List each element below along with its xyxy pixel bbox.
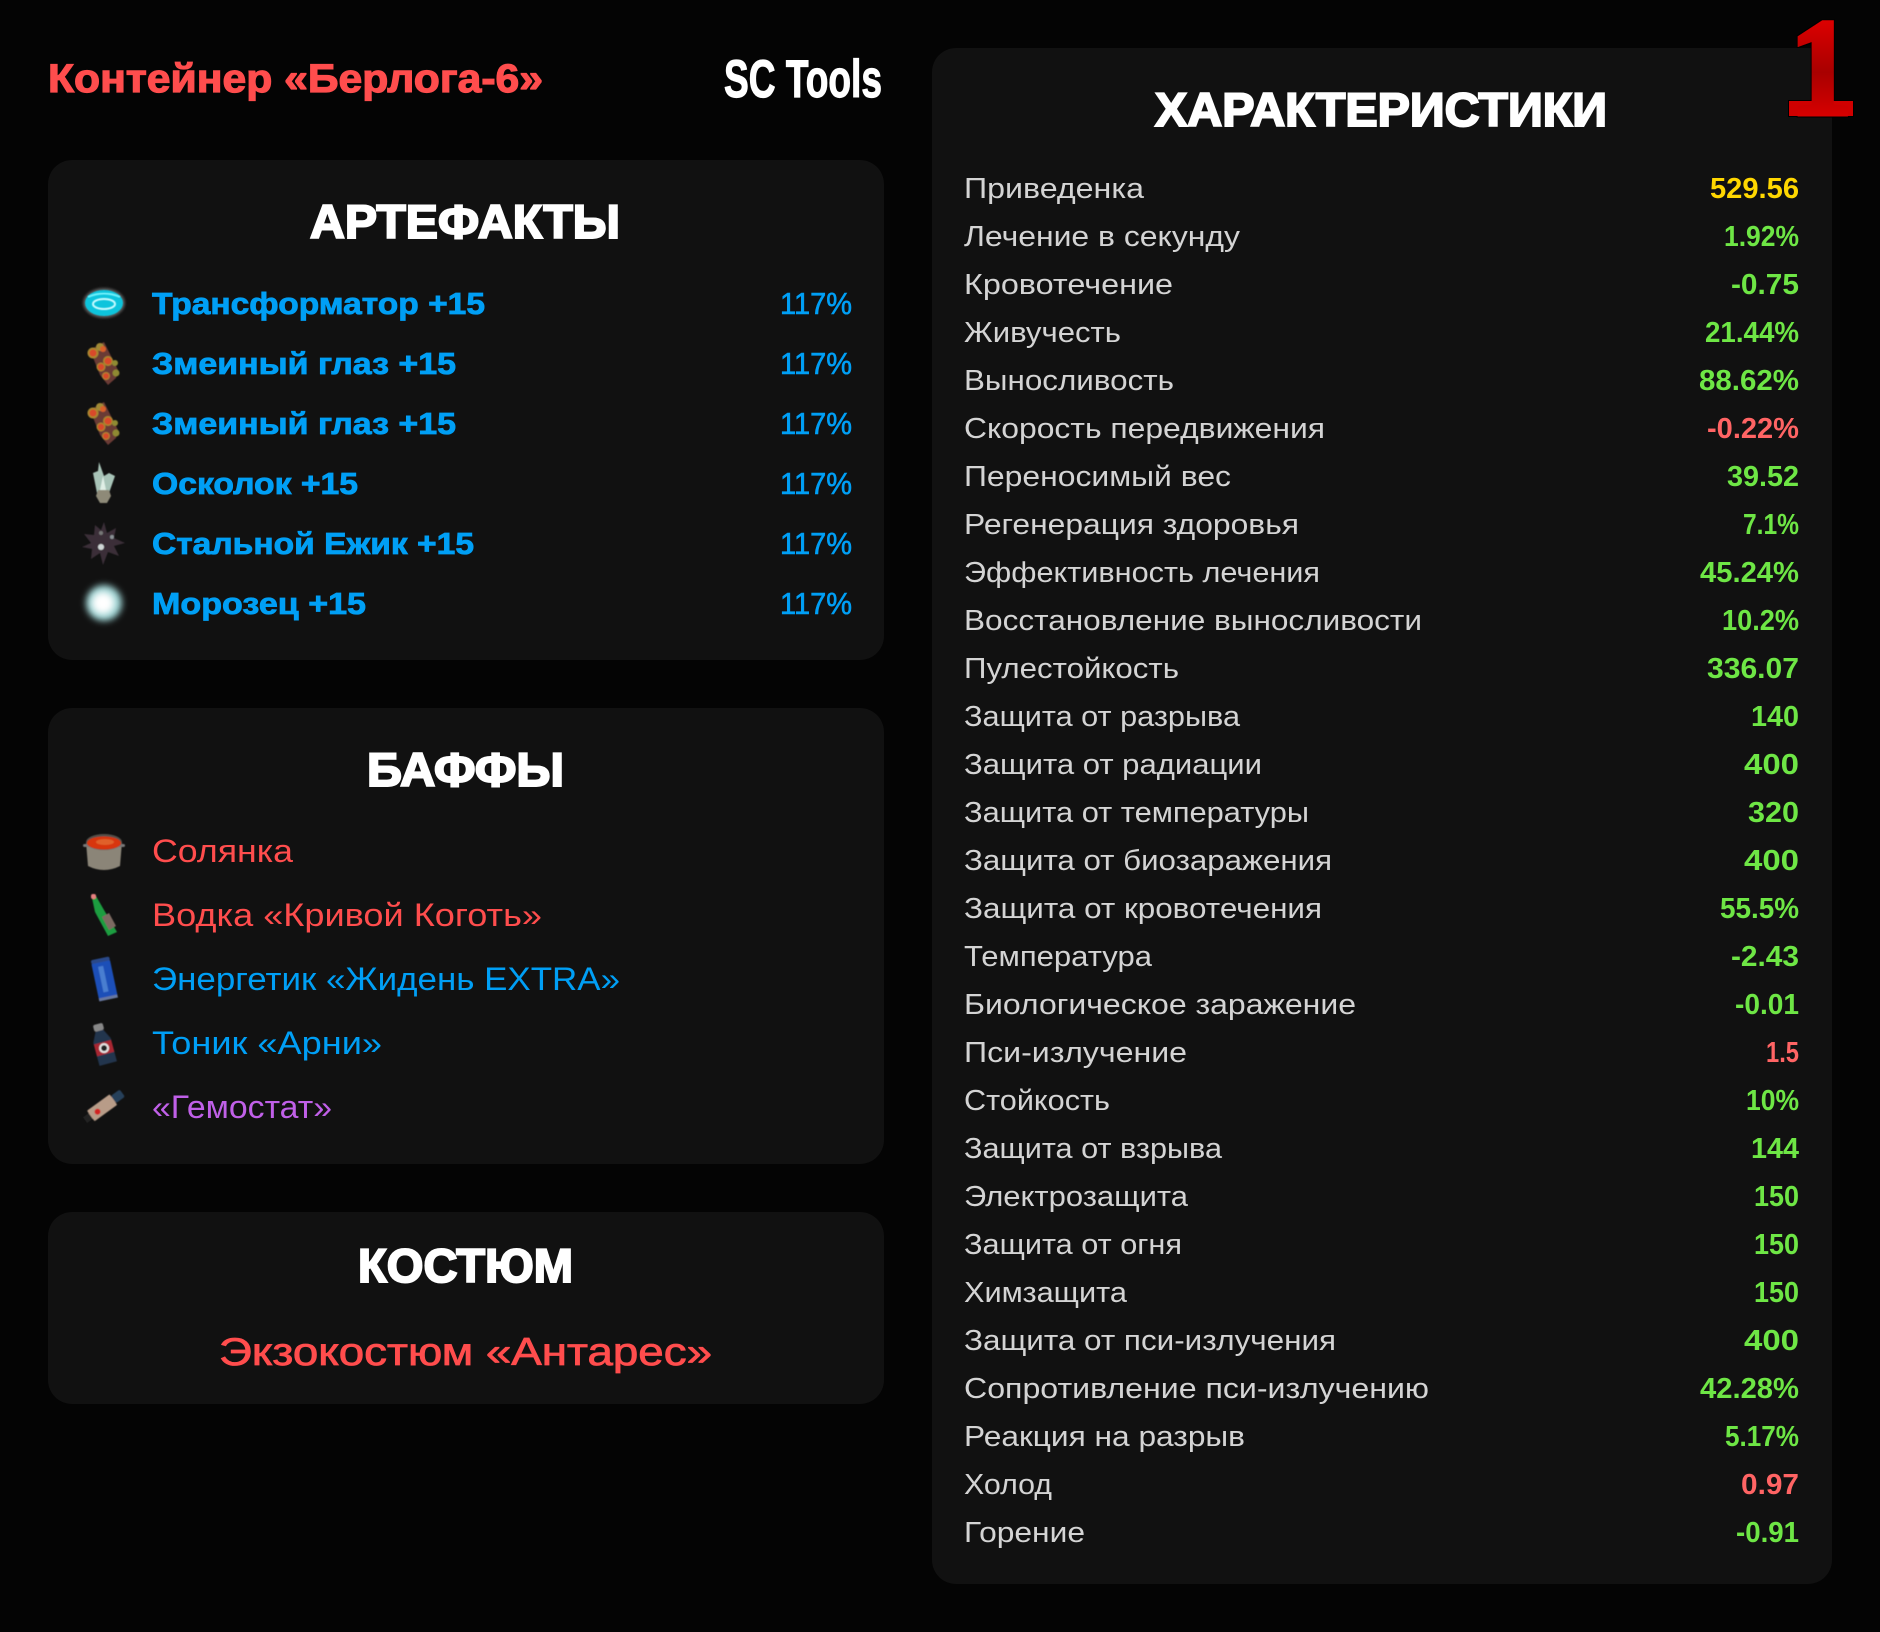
icon: snake eye (88, 342, 120, 385)
artefact row: snake eye: Змеиный глаз +15 (152, 346, 456, 381)
heading: characteristics: ХАРАКТЕРИСТИКИ (1155, 83, 1607, 136)
stats list: 10.2% (1722, 605, 1799, 637)
stats list: Стойкость (964, 1085, 1110, 1117)
stats list: 7.1% (1743, 509, 1799, 541)
panel: suit (48, 1212, 884, 1404)
stats list: Пси-излучение (964, 1037, 1187, 1069)
icon: transformer (83, 288, 125, 318)
icon: snake eye (88, 402, 120, 445)
icon: energy can (91, 956, 118, 1001)
stats list: Биологическое заражение (964, 989, 1356, 1021)
stats list: 45.24% (1700, 557, 1799, 589)
stats list: 144 (1751, 1133, 1799, 1165)
panel: artefacts (48, 160, 884, 660)
stats list: 21.44% (1705, 317, 1799, 349)
stats list: 529.56 (1710, 173, 1799, 205)
stats list: Живучесть (964, 317, 1121, 349)
stats list: -2.43 (1731, 941, 1799, 973)
heading: artefacts: АРТЕФАКТЫ (310, 195, 620, 248)
stats list: 39.52 (1727, 461, 1799, 493)
percent: 117% (780, 406, 852, 441)
stats list: Химзащита (964, 1277, 1127, 1309)
stats list: Защита от пси-излучения (964, 1325, 1336, 1357)
stats list: 10% (1746, 1085, 1799, 1117)
icon: steel hedgehog (82, 522, 125, 565)
stats list: -0.91 (1736, 1517, 1799, 1549)
brand: SC Tools: SC Tools (724, 50, 882, 109)
panel: characteristics (932, 48, 1832, 1584)
buff: hemostat: «Гемостат» (152, 1089, 332, 1125)
artefact row: transformer: Трансформатор +15 (152, 286, 485, 321)
icon: soup pot (83, 834, 125, 870)
stats list: Регенерация здоровья (964, 509, 1299, 541)
icon: vodka bottle (91, 894, 117, 936)
stats list: 1.5 (1766, 1037, 1799, 1069)
stats list: -0.22% (1707, 413, 1799, 445)
heading: suit: КОСТЮМ (358, 1239, 573, 1292)
stats list: 320 (1748, 797, 1799, 829)
stats list: Температура (964, 941, 1152, 973)
stats list: Сопротивление пси-излучению (964, 1373, 1429, 1405)
panel: buffs (48, 708, 884, 1164)
stats list: Реакция на разрыв (964, 1421, 1245, 1453)
stats list: 400 (1744, 749, 1799, 781)
stats list: Переносимый вес (964, 461, 1231, 493)
percent: 117% (780, 286, 852, 321)
stats list: Защита от огня (964, 1229, 1182, 1261)
stats list: Защита от взрыва (964, 1133, 1222, 1165)
stats list: 55.5% (1720, 893, 1799, 925)
percent: 117% (780, 346, 852, 381)
stats list: Холод (964, 1469, 1052, 1501)
percent: 117% (780, 466, 852, 501)
buff: vodka: Водка «Кривой Коготь» (152, 897, 542, 933)
icon: hemostat (81, 1088, 126, 1125)
stats list: 400 (1744, 845, 1799, 877)
stats list: 150 (1754, 1181, 1799, 1213)
stats list: 336.07 (1707, 653, 1799, 685)
artefact row: shard: Осколок +15 (152, 466, 358, 501)
stats list: Лечение в секунду (964, 221, 1241, 253)
stats list: Пулестойкость (964, 653, 1179, 685)
container title: Контейнер «Берлога-6» (48, 57, 543, 101)
stats list: Выносливость (964, 365, 1174, 397)
buff: energy drink: Энергетик «Жидень EXTRA» (152, 961, 620, 997)
stats list: -0.01 (1735, 989, 1799, 1021)
stats list: 0.97 (1741, 1469, 1799, 1501)
icon: tonic bottle (89, 1022, 117, 1066)
stats list (964, 173, 1799, 1549)
heading: buffs: БАФФЫ (367, 743, 564, 796)
stats list: Кровотечение (964, 269, 1173, 301)
stats list: 42.28% (1700, 1373, 1799, 1405)
stats list: Скорость передвижения (964, 413, 1325, 445)
artefact row: snake eye: Змеиный глаз +15 (152, 406, 456, 441)
buff: tonic: Тоник «Арни» (152, 1025, 382, 1061)
stats list: Защита от температуры (964, 797, 1309, 829)
stats list: Восстановление выносливости (964, 605, 1422, 637)
stats list: 88.62% (1699, 365, 1799, 397)
stats list: Защита от биозаражения (964, 845, 1332, 877)
stats list: Эффективность лечения (964, 557, 1320, 589)
icon: shard (93, 462, 115, 503)
stats list: Защита от радиации (964, 749, 1262, 781)
stats list: 150 (1754, 1277, 1799, 1309)
stats list: Электрозащита (964, 1181, 1188, 1213)
artefact row: steel hedgehog: Стальной Ежик +15 (152, 526, 474, 561)
buff: solyanka: Солянка (152, 833, 293, 869)
percent: 117% (780, 586, 852, 621)
stats list: Приведенка (964, 173, 1144, 205)
stats list: Защита от кровотечения (964, 893, 1322, 925)
stats list: Горение (964, 1517, 1085, 1549)
icon: frost (86, 585, 122, 621)
percent: 117% (780, 526, 852, 561)
stats list: 5.17% (1725, 1421, 1799, 1453)
stats list: 400 (1744, 1325, 1799, 1357)
stats list: 140 (1751, 701, 1799, 733)
stats list: 150 (1754, 1229, 1799, 1261)
stats list: -0.75 (1731, 269, 1799, 301)
stats list: 1.92% (1724, 221, 1799, 253)
suit name: Экзокостюм «Антарес» (219, 1331, 712, 1374)
artefact row: frost: Морозец +15 (152, 586, 366, 621)
stats list: Защита от разрыва (964, 701, 1240, 733)
